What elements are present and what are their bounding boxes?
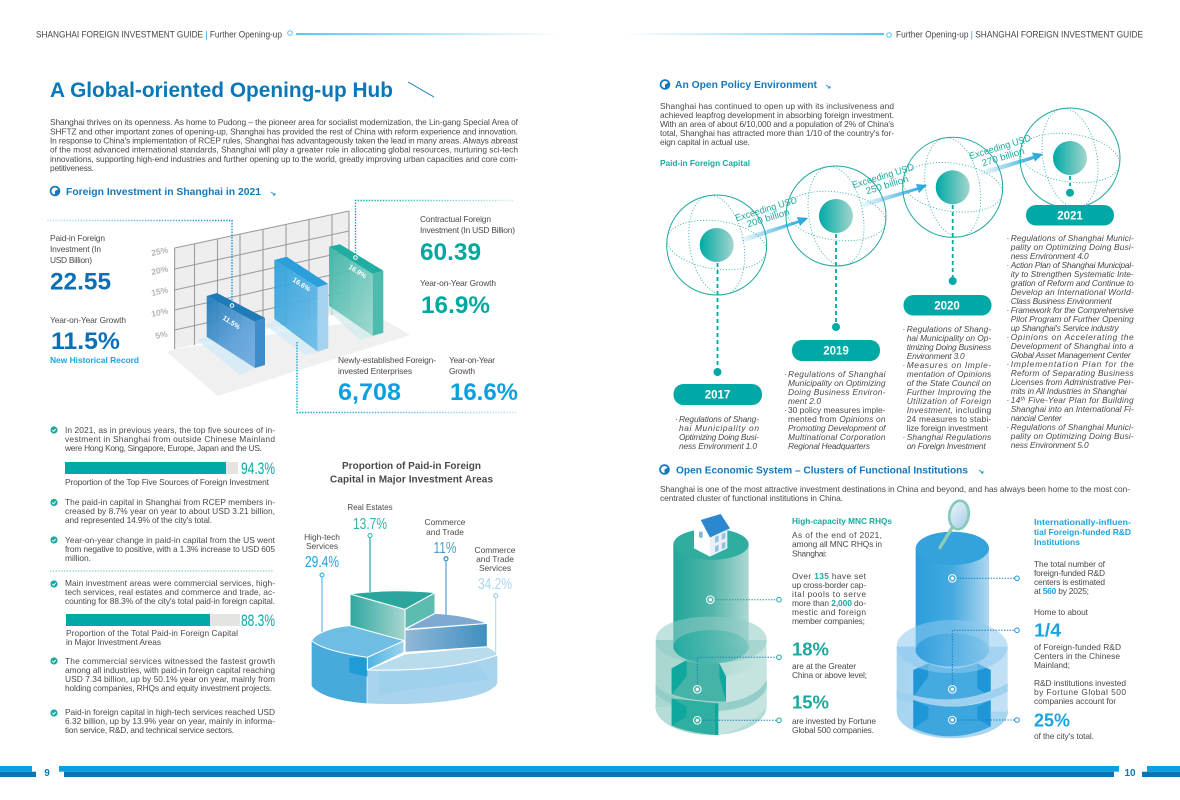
text column: MNC RHQs: among all MNC RHQs in <box>792 539 882 549</box>
pill: 2019: 2019 <box>823 346 849 358</box>
policy paragraph: total, Shanghai has attracted more than 1/10 of the country's for- <box>660 128 894 138</box>
pie label: high-tech services: 29.4% <box>305 554 339 571</box>
economic system paragraph: Shanghai is one of the most attractive investment destinations in China and beyond, and has always been home to the most con- <box>660 484 1130 494</box>
pill: 2020 <box>904 295 992 316</box>
intro paragraph: petitiveness. <box>50 163 94 173</box>
title: A Global-oriented Opening-up Hub <box>50 78 393 102</box>
text column: MNC RHQs: High-capacity MNC RHQs <box>792 517 892 526</box>
pie label: commerce and trade: Commerce <box>425 517 466 527</box>
policy list 2020: hai Municipality on Op- <box>907 333 991 343</box>
footer band: left: 9 <box>44 768 50 779</box>
policy paragraph: achieved leapfrog development in absorbing foreign investment. <box>660 110 894 120</box>
stat: paid-in foreign investment: Paid-in Foreign <box>50 233 105 243</box>
text column: R&D institutions: Home to about <box>1034 607 1089 617</box>
pie label: real estates: 13.7% <box>353 516 387 533</box>
arrow: to 250 billion <box>851 162 927 208</box>
bullet list: sources of investment: creased by 8.7% year on year to about USD 3.21 billion, <box>65 506 275 516</box>
policy list 2021: · <box>1006 359 1009 369</box>
bullet list: investment areas: holding companies, RHQs and equity investment projects. <box>65 683 272 693</box>
policy list 2019: Regulations of Shanghai <box>788 369 887 379</box>
text column: MNC RHQs: are at the Greater <box>792 661 856 671</box>
bullet list: investment areas: tion service, R&D, and technical service sectors. <box>65 725 234 735</box>
section heading: foreign investment: Foreign Investment in Shanghai in 2021 <box>66 187 261 198</box>
text column: MNC RHQs: As of the end of 2021, <box>792 530 882 540</box>
policy list 2020: 24 measures to stabi- <box>907 414 991 424</box>
text column: R&D institutions: foreign-funded R&D <box>1034 568 1105 578</box>
dotted leader: enterprises <box>297 342 517 412</box>
policy list 2021: pality on Optimizing Doing Busi- <box>1010 242 1134 252</box>
3D bar chart: 5% <box>154 329 169 341</box>
arrow: to 270 billion: 270 billion <box>981 146 1026 169</box>
policy list 2019 <box>784 369 887 451</box>
bar: 16.9% <box>329 244 383 336</box>
stat: new enterprises: Growth <box>449 366 475 376</box>
policy list 2019: mented from Opinions on <box>788 414 886 424</box>
3D bar chart: 20% <box>150 264 169 277</box>
economic system paragraph <box>660 484 1130 503</box>
intro paragraph: SHFTZ and other important zones of opening-up, Shanghai has provided the rest of China with reform experience and innovation. <box>50 126 518 136</box>
stat: new enterprises <box>338 355 518 406</box>
bullet list: sources of investment: In 2021, as in previous years, the top five sources of in- <box>65 425 275 435</box>
pie label: commerce and trade services: Commerce <box>475 545 516 555</box>
policy list 2020: lize foreign investment <box>907 423 988 433</box>
policy list 2021: Pilot Program of Further Opening <box>1011 314 1134 324</box>
text column: R&D institutions: at 560 by 2025; <box>1034 586 1089 596</box>
pie label: commerce and trade services <box>475 545 516 655</box>
policy list 2021: Class Business Environment <box>1011 296 1112 306</box>
globe timeline 2020 <box>900 133 1006 285</box>
pie label: commerce and trade: and Trade <box>426 527 464 537</box>
text column: MNC RHQs: more than 2,000 do- <box>792 598 866 608</box>
policy list 2019: 30 policy measures imple- <box>788 405 886 415</box>
bullet list: sources of investment: and represented 14.9% of the city's total. <box>65 515 212 525</box>
policy list 2017: Regulations of Shang- <box>679 414 759 424</box>
slice: commerce and trade 11% <box>405 613 487 652</box>
policy list 2020: Environment 3.0 <box>907 351 965 361</box>
stat: new enterprises: Newly-established Foreign- <box>338 355 436 365</box>
stat: contractual foreign investment: Year-on-Year Growth <box>420 278 496 288</box>
intro paragraph: Shanghai thrives on its openness. As home to Pudong – the pioneer area for socialist modernization, the Lin-gang Special Area of <box>50 117 519 127</box>
policy list 2019: Doing Business Environ- <box>788 387 886 397</box>
policy list 2020 <box>902 324 992 451</box>
progress bar: 94.3%: 94.3% <box>241 459 275 478</box>
globe timeline 2021 <box>1017 104 1123 212</box>
header: right page: Further Opening-up | SHANGHAI FOREIGN INVESTMENT GUIDE <box>896 30 1143 40</box>
policy list 2019: Promoting Development of <box>788 423 887 433</box>
bullet list: sources of investment: The paid-in capital in Shanghai from RCEP members in- <box>65 497 275 507</box>
dotted leader: paid-in <box>47 220 234 307</box>
stat: paid-in foreign investment: 22.55 <box>50 268 111 296</box>
bullet list: investment areas: USD 7.34 billion, up by 50.1% year on year, mainly from <box>65 674 275 684</box>
arrow: to 250 billion: Exceeding USD <box>851 162 916 191</box>
bullet list: sources of investment: Year-on-year change in paid-in capital from the US went <box>65 535 276 545</box>
globe timeline 2017 <box>664 191 770 376</box>
policy list 2019: ment 2.0 <box>788 396 821 406</box>
footer band: right <box>1124 766 1180 779</box>
arrow: to 250 billion: 250 billion <box>865 174 910 197</box>
policy list 2020: · <box>902 324 905 334</box>
stat: contractual foreign investment: Contractual Foreign <box>420 214 491 224</box>
3D bar chart <box>150 211 410 396</box>
stat: 18%: 18% <box>792 638 829 660</box>
bullet list: investment areas: Main investment areas were commercial services, high- <box>65 578 275 588</box>
progress bar: 88.3%: 88.3% <box>241 611 275 630</box>
text column: R&D institutions: Institutions <box>1034 538 1080 547</box>
3D pie chart <box>312 591 497 704</box>
footer band: centre <box>59 766 1119 777</box>
policy paragraph: Shanghai has continued to open up with its inclusiveness and <box>660 101 894 111</box>
pie label: commerce and trade services: Services <box>479 563 511 573</box>
progress bar: 94.3% <box>65 459 275 478</box>
policy list 2021: Global Asset Management Center <box>1011 350 1132 360</box>
stat: contractual foreign investment: Investment (In USD Billion) <box>420 225 515 235</box>
bullet list: investment areas <box>50 578 275 735</box>
policy list 2021: Licenses from Administrative Per- <box>1011 377 1134 387</box>
policy list 2020: Investment, including <box>907 405 992 415</box>
bar: 16.6%: 16.6% <box>291 277 312 294</box>
bullet list: investment areas: tech services, real estates and commerce and trade, ac- <box>65 587 275 597</box>
text column: R&D institutions: Centers in the Chinese <box>1034 651 1120 661</box>
policy list 2021: Framework for the Comprehensive <box>1011 305 1134 315</box>
bullet list: sources of investment: Proportion of the Top Five Sources of Foreign Investment <box>65 477 270 487</box>
teal cylinder leader markers <box>694 596 781 724</box>
3D bar chart: 10% <box>150 306 169 319</box>
policy list 2021: · <box>1006 395 1009 405</box>
pie chart heading: Capital in Major Investment Areas <box>330 474 493 486</box>
policy list 2021: nancial Center <box>1011 413 1063 423</box>
arrow: to 270 billion: Exceeding USD <box>968 133 1033 162</box>
policy list 2021: Develop an International World- <box>1011 287 1134 297</box>
pill: 2021: 2021 <box>1057 210 1083 222</box>
stat: paid-in foreign investment: 11.5% <box>51 328 120 355</box>
pill: 2021 <box>1026 205 1114 226</box>
policy list 2021: up Shanghai's Service industry <box>1011 323 1120 333</box>
bullet list: sources of investment: from negative to positive, with a 1.3% increase to USD 605 <box>65 544 275 554</box>
slice: real estates 13.7% <box>350 591 435 642</box>
pie label: commerce and trade: 11% <box>434 540 456 557</box>
footer band: left <box>0 766 50 779</box>
policy list 2021: ness Environment 5.0 <box>1011 440 1089 450</box>
stat: paid-in foreign investment <box>50 233 139 365</box>
pill: 2017 <box>674 384 762 405</box>
text column: R&D institutions: The total number of <box>1034 559 1106 569</box>
policy list 2021: ity to Strengthen Systematic Inte- <box>1011 269 1134 279</box>
arrow: to 200 billion: Exceeding USD <box>734 195 799 224</box>
stat: 1/4: 1/4 <box>1034 620 1062 640</box>
policy list 2017: ness Environment 1.0 <box>679 441 757 451</box>
bar: 11.5% <box>207 293 265 368</box>
policy paragraph: With an area of about 6/10,000 and a population of 2% of China's <box>660 119 894 129</box>
teal stacked cylinder with house <box>655 514 767 735</box>
stat: paid-in foreign investment: Year-on-Year Growth <box>50 315 126 325</box>
policy list 2019: Regional Headquarters <box>788 441 871 451</box>
text column: R&D institutions: of the city's total. <box>1034 731 1094 741</box>
header: left page <box>36 30 561 40</box>
text column: R&D institutions: by Fortune Global 500 <box>1034 687 1126 697</box>
policy list 2020: timizing Doing Business <box>907 342 992 352</box>
intro paragraph: of the most advanced international standards, Shanghai will play a greater role in allocating global resources, nurturing sci-tech <box>50 144 518 154</box>
policy list 2021: gration of Reform and Continue to <box>1011 278 1134 288</box>
bullet list: investment areas: Paid-in foreign capital in high-tech services reached USD <box>65 707 275 717</box>
pie label: commerce and trade services: and Trade <box>476 554 514 564</box>
stat: paid-in foreign investment: Investment (In <box>50 244 101 254</box>
intro paragraph <box>50 117 519 173</box>
progress bar: 88.3% <box>66 611 275 630</box>
policy list 2021: Action Plan of Shanghai Municipal- <box>1010 260 1134 270</box>
policy list 2020: · <box>902 360 905 370</box>
header: right page <box>622 30 1143 40</box>
policy list 2021: · <box>1006 233 1009 243</box>
arrow: to 200 billion <box>734 195 808 243</box>
text column: MNC RHQs: China or above level; <box>792 670 867 680</box>
stat: contractual foreign investment <box>420 214 515 319</box>
dotted leader: contractual <box>354 200 513 259</box>
bullet list: sources of investment: were Hong Kong, Singapore, Europe, Japan and the US. <box>64 443 262 453</box>
text column: MNC RHQs: up cross-border cap- <box>792 580 866 590</box>
blue cylinder leader markers <box>948 574 1019 724</box>
pie label: real estates <box>347 503 393 592</box>
pie chart heading: Proportion of Paid-in Foreign <box>342 461 481 472</box>
text column: R&D institutions: tial Foreign-funded R&D <box>1034 528 1131 537</box>
bullet list: investment areas: 6.32 billion, up by 13.9% year on year, mainly in informa- <box>65 716 275 726</box>
policy list 2020: of the State Council on <box>907 378 992 388</box>
arrow: to 270 billion <box>968 133 1043 176</box>
stat: 15%: 15% <box>792 692 829 712</box>
pie chart heading <box>330 461 493 486</box>
policy list 2020: mentation of Opinions <box>907 369 992 379</box>
stat: new enterprises: 16.6% <box>450 379 518 406</box>
policy paragraph: eign capital in actual use. <box>660 137 750 147</box>
policy list 2020: Further Improving the <box>907 387 992 397</box>
policy list 2019: Multinational Corporation <box>788 432 886 442</box>
text column: R&D institutions: centers is estimated <box>1034 577 1105 587</box>
policy list 2021: Reform of Separating Business <box>1011 368 1135 378</box>
pie label: commerce and trade <box>425 517 466 615</box>
text column: MNC RHQs: member companies; <box>792 616 865 626</box>
stat: 25%: 25% <box>1034 710 1070 730</box>
policy paragraph <box>660 101 894 147</box>
policy list 2021 <box>1006 233 1135 450</box>
icon: house <box>694 514 730 557</box>
policy list 2020: Regulations of Shang- <box>907 324 991 334</box>
policy list 2019: Municipality on Optimizing <box>788 378 886 388</box>
policy list 2021: Opinions on Accelerating the <box>1011 332 1134 342</box>
blue stacked cylinder with magnifier <box>897 499 1008 738</box>
bullet list: investment areas: counting for 88.3% of the city's total paid-in foreign capital. <box>65 596 275 606</box>
policy list 2021: Five-Year Plan for Building <box>1026 395 1134 405</box>
intro paragraph: In response to China's implementation of RCEP rules, Shanghai has advantageously taken the lead in many areas. Always abreast <box>50 136 519 146</box>
globe timeline 2019 <box>783 162 889 331</box>
section heading: open policy: An Open Policy Environment <box>675 80 818 91</box>
policy list 2017 <box>675 414 759 451</box>
stat: new enterprises: Year-on-Year <box>449 355 495 365</box>
policy list 2021: Development of Shanghai into a <box>1011 341 1134 351</box>
chart floor <box>167 318 410 396</box>
stat: contractual foreign investment: 16.9% <box>421 292 490 319</box>
bar: 16.6% <box>274 257 328 352</box>
policy list 2020: Shanghai Regulations <box>907 432 992 442</box>
policy list 2021: pality on Optimizing Doing Busi- <box>1010 431 1134 441</box>
stat: paid-in foreign investment: New Historical Record <box>50 356 139 365</box>
text column: MNC RHQs: are invested by Fortune <box>792 716 876 726</box>
section heading: open economic system: Open Economic System – Clusters of Functional Institutions <box>676 466 968 476</box>
text column: MNC RHQs <box>792 517 892 735</box>
bullet list: investment areas: Proportion of the Total Paid-in Foreign Capital <box>66 628 238 638</box>
policy list 2021: · <box>1006 260 1009 270</box>
policy list 2019: · <box>784 405 787 415</box>
subheading: paid-in capital: Paid-in Foreign Capital <box>660 159 750 168</box>
policy list 2021: 14 <box>1011 395 1020 405</box>
bar: 16.9%: 16.9% <box>347 264 368 281</box>
bullet list: investment areas: in Major Investment Areas <box>66 637 161 647</box>
bullet list: sources of investment: vestment in Shanghai from outside Chinese Mainland <box>65 434 275 444</box>
policy list 2021: th <box>1021 396 1025 402</box>
bullet list: sources of investment <box>50 425 276 563</box>
text column: MNC RHQs: mestic and foreign <box>792 607 866 617</box>
arrow: to 200 billion: 200 billion <box>746 207 791 230</box>
policy list 2017: hai Municipality on <box>679 423 759 433</box>
text column: R&D institutions <box>1034 518 1131 741</box>
slice: commerce and trade services 34.2% <box>367 647 497 704</box>
policy list 2021: ness Environment 4.0 <box>1011 251 1089 261</box>
policy list 2021: · <box>1006 332 1009 342</box>
text column: R&D institutions: Internationally-influen- <box>1034 518 1131 527</box>
3D bar chart: 15% <box>150 285 169 298</box>
bullet list: sources of investment: million. <box>65 553 91 563</box>
stat: contractual foreign investment: 60.39 <box>420 239 481 266</box>
text column: MNC RHQs: Over 135 have set <box>792 571 867 581</box>
policy list 2017: Optimizing Doing Busi- <box>679 432 759 442</box>
text column: MNC RHQs: Global 500 companies. <box>792 725 874 735</box>
slice: high-tech services 29.4% <box>312 626 404 703</box>
bullet list: investment areas: The commercial services witnessed the fastest growth <box>65 656 275 666</box>
pie label: high-tech services: Services <box>306 541 338 551</box>
policy list 2021: mits in All Industries in Shanghai <box>1011 386 1128 396</box>
pill: 2020: 2020 <box>934 300 960 312</box>
policy list 2017: · <box>675 414 678 424</box>
stat: new enterprises: invested Enterprises <box>338 366 412 376</box>
policy list 2021: · <box>1006 305 1009 315</box>
header: left page: SHANGHAI FOREIGN INVESTMENT GUIDE | Further Opening-up <box>36 30 282 40</box>
text column: R&D institutions: companies account for <box>1034 696 1116 706</box>
policy list 2020: on Foreign Investment <box>907 441 986 451</box>
bullet list: investment areas: among all industries, with paid-in foreign capital reaching <box>65 665 275 675</box>
stat: new enterprises: 6,708 <box>338 379 401 406</box>
stat: paid-in foreign investment: USD Billion) <box>50 255 92 265</box>
pie label: commerce and trade services: 34.2% <box>478 576 512 593</box>
pie label: high-tech services <box>304 532 340 632</box>
policy list 2021: Implementation Plan for the <box>1011 359 1134 369</box>
3D bar chart: 25% <box>150 245 169 258</box>
pill: 2017: 2017 <box>705 390 730 402</box>
text column: MNC RHQs: ital pools to serve <box>792 589 866 599</box>
pie label: high-tech services: High-tech <box>304 532 340 542</box>
policy list 2020: · <box>902 432 905 442</box>
text column: R&D institutions: of Foreign-funded R&D <box>1034 642 1121 652</box>
policy list 2020: Measures on Imple- <box>907 360 991 370</box>
footer band: right: 10 <box>1124 768 1136 779</box>
pill: 2019 <box>792 340 880 361</box>
text column: MNC RHQs: Shanghai: <box>792 548 827 558</box>
text column: R&D institutions: R&D institutions invested <box>1034 678 1126 688</box>
economic system paragraph: centrated cluster of functional institutions in China. <box>660 493 843 503</box>
text column: R&D institutions: Mainland; <box>1034 660 1070 670</box>
policy list 2019: · <box>784 369 787 379</box>
bar: 11.5%: 11.5% <box>221 315 242 332</box>
pie label: real estates: Real Estates <box>347 503 393 512</box>
policy list 2021: · <box>1006 422 1009 432</box>
dotted divider <box>50 570 274 572</box>
policy list 2021: Regulations of Shanghai Munici- <box>1011 233 1134 243</box>
intro paragraph: innovations, supporting high-end industries and further opening up to the world, greatly improving urban capacities and core com- <box>50 154 518 164</box>
policy list 2020: Utilization of Foreign <box>907 396 992 406</box>
icon: magnifying glass <box>940 499 971 548</box>
policy list 2021: Shanghai into an International Fi- <box>1011 404 1134 414</box>
policy list 2021: Regulations of Shanghai Munici- <box>1011 422 1134 432</box>
